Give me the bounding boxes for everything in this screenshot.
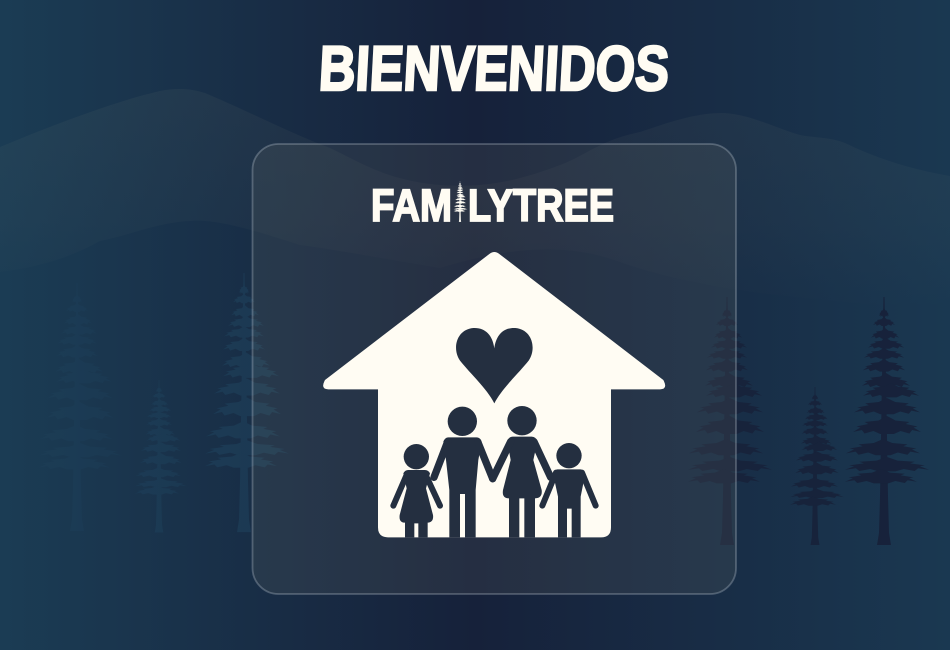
icon: house with family [323, 252, 665, 537]
logo text: FAM: FAM [371, 180, 452, 231]
logo text: LYTREE: LYTREE [468, 180, 614, 231]
mountains [0, 89, 950, 310]
tree: right small [790, 387, 844, 545]
icon: heart [456, 328, 533, 403]
figure: mother [493, 406, 551, 537]
figure: boy [542, 443, 596, 537]
figure: girl [393, 444, 440, 537]
tree: right behind panel [688, 297, 772, 545]
house silhouette [323, 252, 665, 537]
figure: father [434, 407, 493, 537]
logo icon: pine tree as the letter I [454, 181, 467, 222]
panel: glass card [252, 144, 736, 594]
tree: left tall faded [38, 283, 122, 531]
title: Bienvenidos: BIENVENIDOS [317, 34, 671, 104]
tree: left tall near panel [205, 273, 289, 532]
logo: FamilyTree [371, 180, 614, 231]
tree: right tall [845, 297, 929, 545]
tree: left small faded [135, 380, 187, 533]
